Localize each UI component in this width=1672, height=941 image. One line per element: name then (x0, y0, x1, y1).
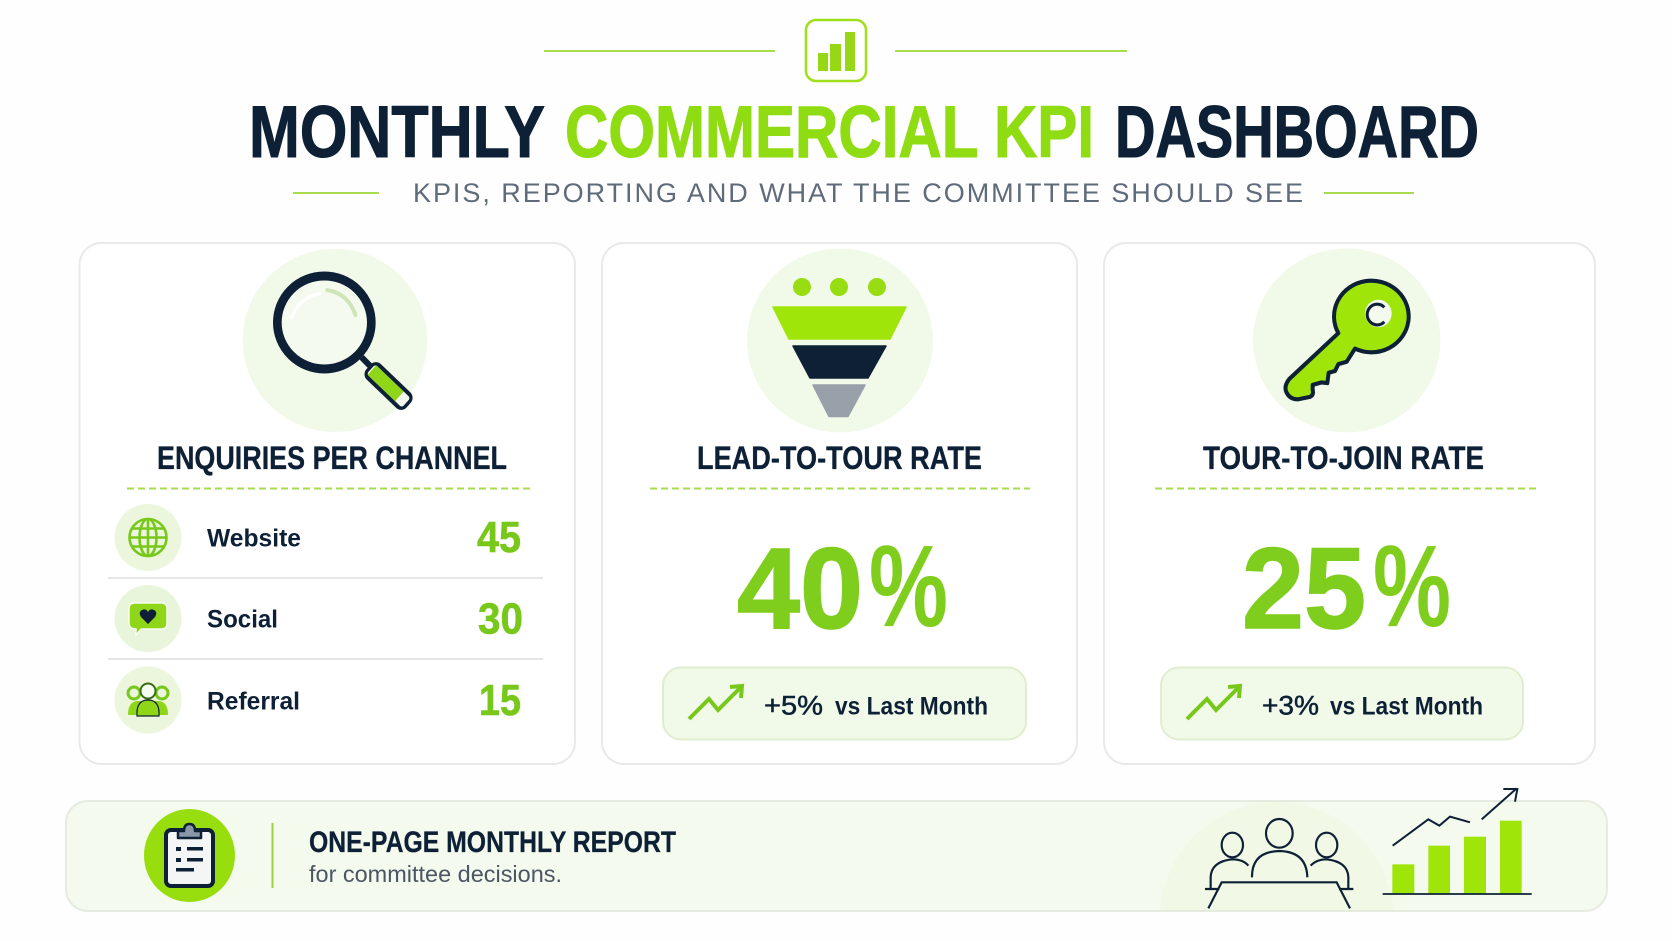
icon: magnifying glass (243, 249, 427, 432)
icon: clipboard (144, 809, 235, 902)
row: website (114, 504, 521, 571)
metric value: 25 (1242, 525, 1366, 653)
row: website: Website (207, 524, 301, 552)
row: social: 30 (478, 594, 523, 644)
row: referral (114, 666, 521, 734)
row: website: 45 (477, 513, 521, 562)
metric value (1242, 521, 1451, 653)
heading: ENQUIRIES PER CHANNEL (157, 440, 507, 476)
title: COMMERCIAL KPI (565, 92, 1094, 173)
metric value (737, 521, 948, 653)
title: DASHBOARD (1115, 92, 1479, 173)
trend pill: vs Last Month (835, 692, 988, 720)
illustration: committee at table (1160, 802, 1393, 910)
illustration: growth chart with arrow (1383, 788, 1532, 894)
row: referral: Referral (207, 688, 300, 716)
row: social: Social (207, 606, 278, 634)
title (249, 92, 1479, 173)
panel: enquiries per channel (80, 243, 575, 764)
heading: LEAD-TO-TOUR RATE (697, 440, 982, 476)
trend pill: vs Last Month (1330, 692, 1483, 720)
metric value: 40 (737, 525, 863, 653)
icon: funnel (747, 248, 933, 432)
panel: one-page monthly report (66, 788, 1607, 911)
icon: key (1253, 248, 1440, 432)
panel: tour-to-join rate (1104, 243, 1595, 764)
trend pill (1161, 668, 1523, 740)
metric value: % (1373, 521, 1451, 651)
title: MONTHLY (249, 92, 545, 173)
report text: ONE-PAGE MONTHLY REPORT (309, 826, 676, 859)
subtitle: KPIS, REPORTING AND WHAT THE COMMITTEE SHOULD SEE (413, 178, 1303, 208)
header icon: bar chart with rules (544, 20, 1127, 81)
trend pill: +3% (1262, 690, 1319, 720)
report text: for committee decisions. (309, 861, 562, 887)
trend pill (663, 668, 1026, 740)
panel: lead-to-tour rate (602, 243, 1077, 764)
heading: TOUR-TO-JOIN RATE (1203, 440, 1484, 476)
row: referral: 15 (479, 676, 521, 725)
report text (309, 826, 676, 887)
metric value: % (869, 521, 948, 651)
row: social (114, 585, 523, 652)
trend pill: +5% (764, 690, 823, 720)
